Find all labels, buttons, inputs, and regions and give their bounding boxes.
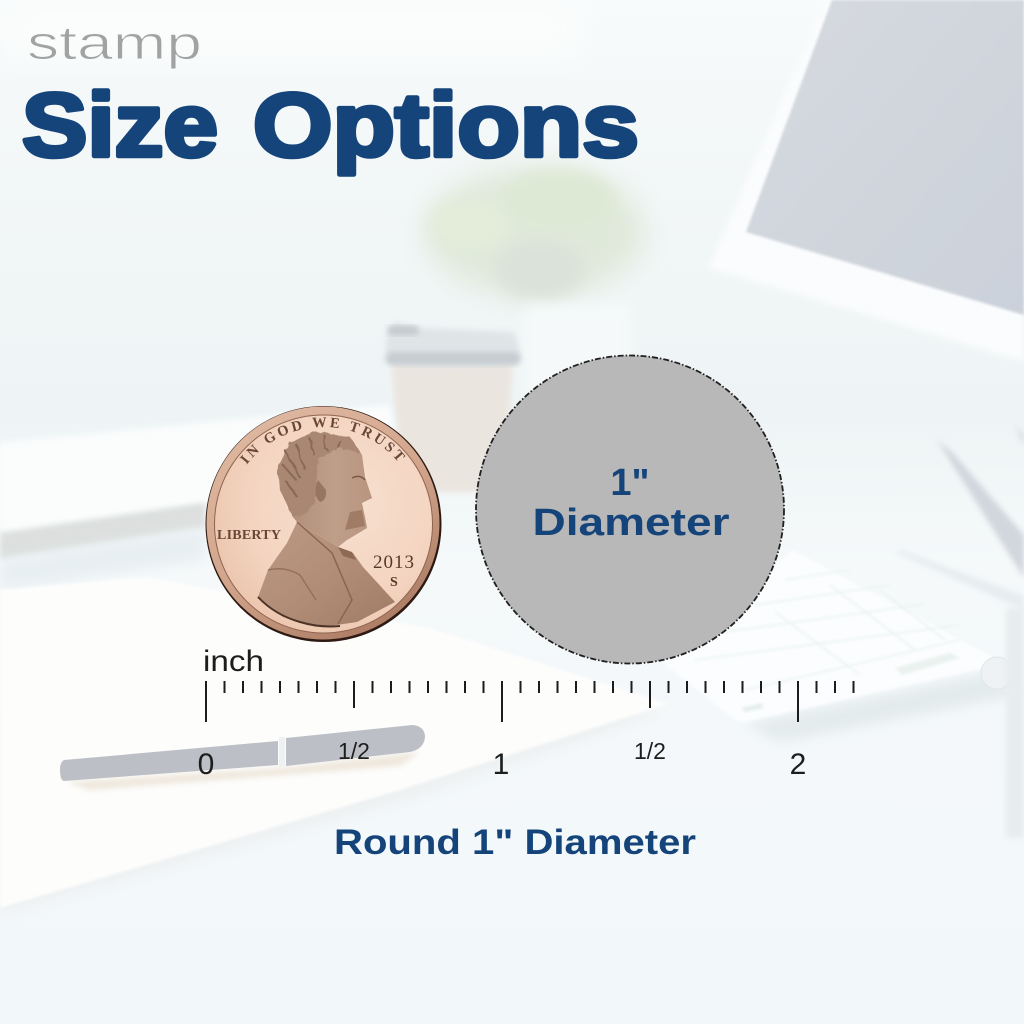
ruler labels: 2 — [790, 748, 806, 781]
keyboard hinge — [981, 657, 1013, 689]
ruler — [198, 645, 854, 781]
pen — [60, 725, 425, 790]
pencil cup — [893, 424, 1024, 838]
coin text: S: S — [390, 575, 398, 590]
1 inch diameter stamp circle — [476, 356, 784, 664]
ruler labels: 0 — [198, 748, 214, 781]
ruler unit: inch: inch — [203, 645, 264, 678]
ruler labels: 1/2 — [634, 738, 666, 764]
ruler labels: 1/2 — [338, 738, 370, 764]
ruler labels: 1 — [493, 748, 509, 781]
coin text: LIBERTY: LIBERTY — [217, 528, 281, 543]
Lincoln portrait — [258, 432, 395, 627]
coin inscription: IN GOD WE TRUST — [240, 417, 406, 464]
keyboard — [663, 550, 1020, 742]
title: Size Options — [22, 76, 639, 176]
plant pot — [525, 305, 630, 395]
subtitle: stamp: stamp — [27, 16, 202, 69]
title: Size Options: Options — [253, 76, 639, 176]
sheet of paper — [0, 577, 668, 915]
plant — [425, 168, 645, 300]
ruler labels — [198, 738, 806, 781]
label: 1": 1" — [610, 462, 650, 504]
notebook on the desk — [0, 405, 400, 590]
coin text: 2013: 2013 — [373, 552, 414, 573]
title: Size Options: Size — [22, 76, 218, 176]
paper cup — [386, 322, 520, 492]
monitor — [708, 0, 1024, 362]
ruler ticks — [206, 681, 854, 722]
icon: 2013 penny — [206, 406, 442, 642]
label: Diameter: Diameter — [532, 502, 730, 544]
caption: Round 1" Diameter: Round 1" Diameter — [334, 823, 696, 862]
